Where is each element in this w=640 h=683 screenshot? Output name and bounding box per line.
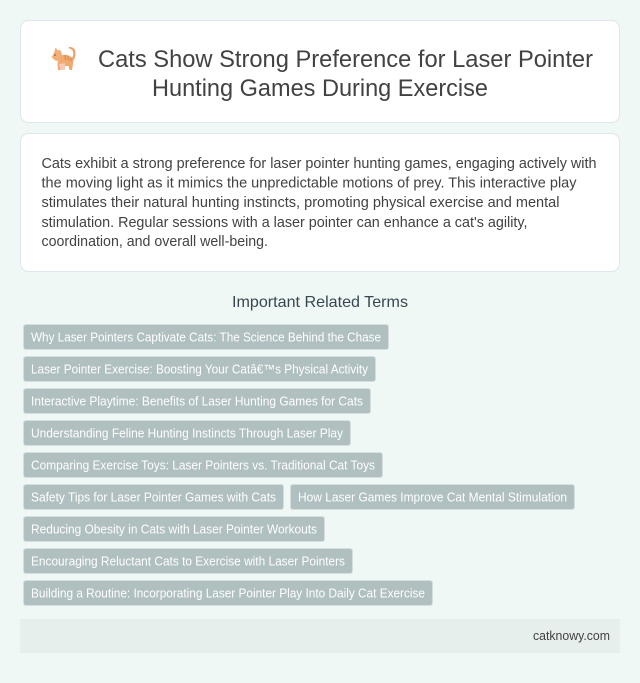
title text <box>98 46 593 102</box>
tag 10: Building a Routine: Incorporating Laser Pointer Play Into Daily Cat Exercise <box>31 586 425 600</box>
tag 6 <box>24 484 284 510</box>
tag 1 <box>24 324 388 350</box>
tag 6: Safety Tips for Laser Pointer Games with Cats <box>31 490 276 504</box>
panel: summary: stimulates their natural hunting instincts, promoting physical exercise and mental <box>42 194 560 211</box>
tag 9 <box>24 548 352 574</box>
panel: summary: the moving light as it mimics the unpredictable motions of prey. This interactive play <box>42 174 577 192</box>
tag 4: Understanding Feline Hunting Instincts Through Laser Play <box>31 426 344 440</box>
tag 2: Laser Pointer Exercise: Boosting Your Catâ€™s Physical Activity <box>31 362 369 376</box>
tag 4 <box>24 420 350 446</box>
tag 5 <box>24 452 382 478</box>
tag 3: Interactive Playtime: Benefits of Laser Hunting Games for Cats <box>31 394 363 408</box>
panel: summary: coordination, and overall well-being. <box>42 233 268 250</box>
title text: Cats Show Strong Preference for Laser Pointer <box>98 46 593 73</box>
tag 2 <box>24 356 376 382</box>
tag 5: Comparing Exercise Toys: Laser Pointers vs. Traditional Cat Toys <box>31 458 375 472</box>
tag 10 <box>24 580 432 606</box>
tag 3 <box>24 388 370 414</box>
tag 9: Encouraging Reluctant Cats to Exercise with Laser Pointers <box>31 554 345 568</box>
tag 8: Reducing Obesity in Cats with Laser Pointer Workouts <box>31 522 317 536</box>
title text: Hunting Games During Exercise <box>152 75 488 102</box>
icon: cat <box>52 47 76 70</box>
tag 8 <box>24 516 324 542</box>
panel: summary: stimulation. Regular sessions with a laser pointer can enhance a cat's agility, <box>42 214 528 231</box>
tag list <box>24 324 574 606</box>
panel: title <box>20 20 620 122</box>
footer <box>20 619 620 653</box>
panel: summary <box>20 134 620 272</box>
tag 1: Why Laser Pointers Captivate Cats: The Science Behind the Chase <box>31 330 381 344</box>
tag 7: How Laser Games Improve Cat Mental Stimulation <box>298 490 567 504</box>
tag 7 <box>290 484 574 510</box>
panel: summary: Cats exhibit a strong preference for laser pointer hunting games, engaging actively with <box>42 155 596 172</box>
footer: catknowy.com <box>533 628 610 643</box>
heading: related terms: Important Related Terms <box>232 294 408 311</box>
